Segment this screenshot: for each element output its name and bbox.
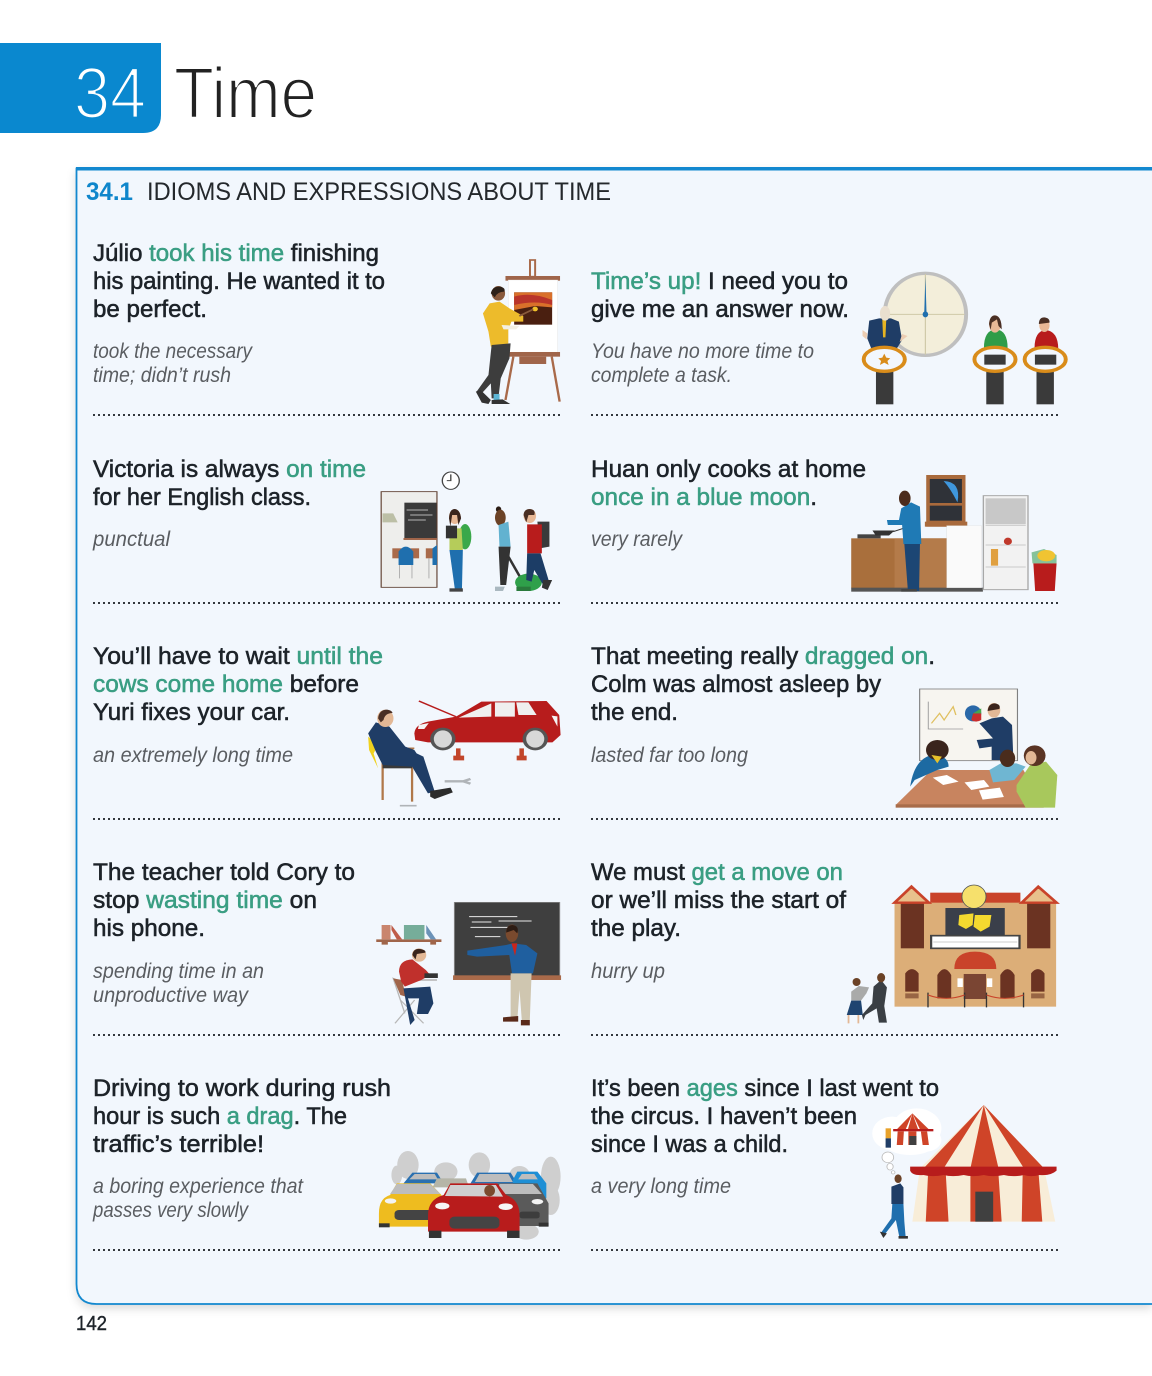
example: a drag: passes very slowly [92, 1199, 249, 1222]
example: ages: since I was a child. [591, 1131, 788, 1158]
example: ages: It’s been ages since I last went to [591, 1075, 939, 1102]
icon: quiz show with clock [863, 273, 1066, 404]
example: get a move on: We must get a move on [591, 859, 843, 886]
icon: man remembering a circus tent [872, 1105, 1057, 1239]
icon: theatre and couple hurrying [847, 885, 1057, 1023]
icon: man cooking in kitchen [851, 475, 1057, 592]
example: once in a blue moon: Huan only cooks at home [591, 456, 866, 483]
example: wasting time: spending time in an [93, 960, 264, 983]
chapter number tab: 34 [74, 54, 146, 134]
example: until the cows come home: You’ll have to wait until the [93, 643, 383, 670]
example: time's up [591, 268, 849, 387]
example: a drag: a boring experience that [93, 1175, 304, 1198]
example: wasting time: unproductive way [93, 984, 249, 1007]
example: get a move on: the play. [591, 915, 681, 942]
example: wasting time: The teacher told Cory to [93, 859, 355, 886]
section heading: IDIOMS AND EXPRESSIONS ABOUT TIME [147, 178, 611, 206]
example: until the cows come home: an extremely long time [93, 744, 293, 767]
divider row 4 [93, 1034, 1059, 1036]
example: dragged on: Colm was almost asleep by [591, 671, 881, 698]
example: a drag [92, 1075, 391, 1222]
example: a drag: traffic’s terrible! [93, 1131, 264, 1158]
example: get a move on: or we’ll miss the start of [591, 887, 846, 914]
example: on time [92, 456, 366, 551]
section heading: 34.1 [86, 178, 133, 206]
divider row 1 [93, 414, 1059, 416]
panel: idioms and expressions about time [76, 167, 1152, 1304]
example: until the cows come home [93, 643, 383, 767]
title: Time [174, 54, 317, 134]
example: wasting time: stop wasting time on [93, 887, 317, 914]
example: dragged on: the end. [591, 699, 678, 726]
divider row 5 [93, 1249, 1059, 1251]
example: on time: punctual [92, 528, 171, 551]
example: time's up: You have no more time to [591, 340, 814, 363]
icon: teacher and student with phone [376, 902, 561, 1025]
example: time's up: Time’s up! I need you to [591, 268, 848, 295]
chapter number tab [0, 43, 161, 134]
example: took his time: Júlio took his time finishing [93, 240, 379, 267]
example: took his time [93, 240, 385, 387]
example: took his time: his painting. He wanted it to [93, 268, 385, 295]
example: time's up: complete a task. [591, 364, 732, 387]
example: dragged on [591, 643, 935, 767]
example: ages: the circus. I haven’t been [591, 1103, 857, 1130]
example: wasting time [93, 859, 355, 1007]
example: a drag: hour is such a drag. The [93, 1103, 347, 1130]
example: dragged on: lasted far too long [591, 744, 748, 767]
example: once in a blue moon [591, 456, 866, 551]
example: on time: Victoria is always on time [93, 456, 366, 483]
divider row 2 [93, 602, 1059, 604]
page number: 142 [76, 1313, 107, 1335]
icon: mechanic sitting beside a raised car [368, 701, 561, 806]
example: until the cows come home: Yuri fixes your car. [93, 699, 290, 726]
icon: painter at an easel [476, 260, 560, 404]
icon: bored people in a meeting [896, 689, 1057, 808]
example: until the cows come home: cows come home before [93, 671, 359, 698]
example: time's up: give me an answer now. [591, 296, 849, 323]
icon: classroom with late students [381, 472, 552, 592]
example: a drag: Driving to work during rush [93, 1075, 391, 1102]
example: ages: a very long time [591, 1175, 731, 1198]
example: get a move on [591, 859, 846, 983]
icon: cars in a traffic jam [379, 1151, 561, 1240]
example: once in a blue moon: very rarely [591, 528, 683, 551]
divider row 3 [93, 818, 1059, 820]
example: took his time: time; didn’t rush [93, 364, 231, 387]
example: took his time: be perfect. [93, 296, 207, 323]
example: ages [591, 1075, 939, 1198]
example: took his time: took the necessary [93, 340, 253, 363]
example: once in a blue moon: once in a blue moon. [591, 484, 817, 511]
example: dragged on: That meeting really dragged on. [591, 643, 935, 670]
example: wasting time: his phone. [93, 915, 205, 942]
example: on time: for her English class. [93, 484, 311, 511]
example: get a move on: hurry up [591, 960, 665, 983]
